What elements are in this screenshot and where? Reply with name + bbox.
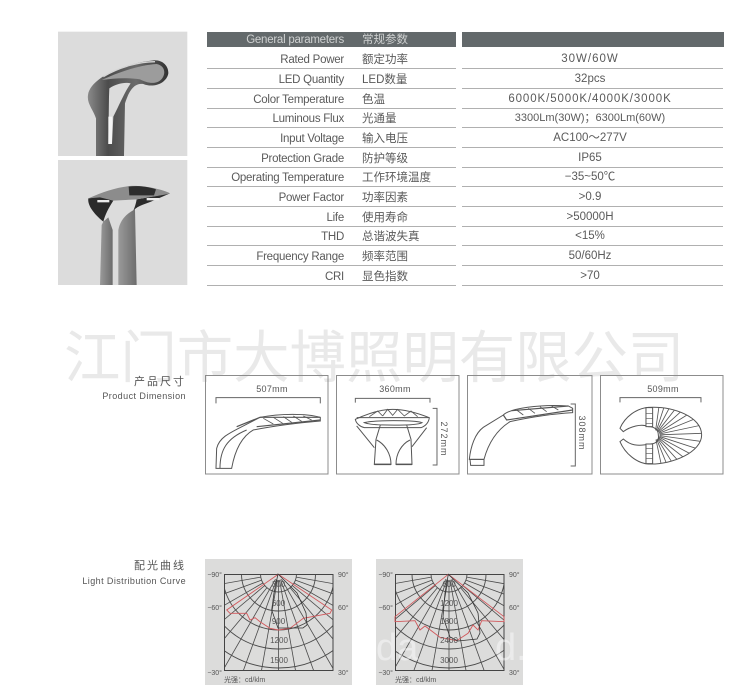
text: 308mm: 308mm bbox=[577, 415, 587, 451]
row: rated power: Rated Power bbox=[280, 54, 344, 66]
chart 1 labels: 60° bbox=[338, 604, 349, 612]
chart 1 labels: 900 bbox=[272, 617, 286, 626]
row: CRI bbox=[207, 270, 723, 286]
table header: right bar bbox=[462, 32, 724, 47]
label: light distribution curve: 配光曲线 bbox=[134, 558, 186, 572]
text: 272mm: 272mm bbox=[439, 421, 449, 457]
chart 2 labels: −90° bbox=[378, 571, 393, 579]
label: light distribution curve bbox=[82, 558, 186, 586]
red curve 1 bbox=[227, 574, 332, 630]
chart panel: light distribution curve 2 bbox=[376, 559, 523, 685]
chart 2 labels: −30° bbox=[378, 669, 393, 677]
chart 1 labels: −30° bbox=[207, 669, 222, 677]
drawing: lamp outline top bbox=[619, 397, 702, 464]
chart 2 labels: 90° bbox=[509, 571, 520, 579]
row: protection grade: IP65 bbox=[578, 152, 602, 164]
drawing: lamp outline side 2 bbox=[469, 404, 575, 466]
row: operating temperature bbox=[207, 171, 723, 187]
row: THD: 总谐波失真 bbox=[362, 230, 420, 242]
watermark: white letters over chart 2: da bbox=[376, 627, 419, 669]
text: 507mm: 507mm bbox=[256, 384, 288, 394]
row: color temperature: 6000K/5000K/4000K/3000K bbox=[508, 93, 672, 105]
row: CRI: >70 bbox=[580, 270, 600, 282]
chart 1 labels: 600 bbox=[272, 599, 286, 608]
row: THD: THD bbox=[321, 231, 344, 243]
row: rated power bbox=[207, 53, 723, 69]
row: life: Life bbox=[326, 212, 344, 224]
row: LED quantity: LED数量 bbox=[362, 74, 407, 86]
row: CRI: 显色指数 bbox=[362, 270, 408, 282]
header row text: General parameters bbox=[246, 34, 344, 46]
box: side dimension 507mm bbox=[206, 376, 328, 474]
row: operating temperature: Operating Temperature bbox=[231, 172, 344, 184]
row: luminous flux: 3300Lm(30W)；6300Lm(60W) bbox=[515, 112, 665, 124]
chart 2 labels: 光强：cd/klm bbox=[395, 675, 436, 684]
row: input voltage: 输入电压 bbox=[362, 132, 408, 144]
chart 1 labels: −60° bbox=[207, 604, 222, 612]
row: luminous flux: 光通量 bbox=[362, 112, 396, 124]
drawing: lamp outline front bbox=[355, 398, 437, 465]
row: frequency range bbox=[207, 250, 723, 266]
header row text: 常规参数 bbox=[362, 34, 408, 46]
chart 2 labels bbox=[378, 571, 520, 684]
row: operating temperature: 工作环境温度 bbox=[362, 172, 431, 184]
row: luminous flux: Luminous Flux bbox=[272, 113, 344, 125]
row: protection grade bbox=[207, 152, 723, 168]
row: input voltage: Input Voltage bbox=[280, 133, 344, 145]
chart 2 labels: 60° bbox=[509, 604, 520, 612]
row: THD: <15% bbox=[575, 230, 605, 242]
photo: lamp front view bbox=[58, 160, 187, 285]
row: frequency range: 频率范围 bbox=[362, 250, 408, 262]
chart panel: light distribution curve 1 bbox=[205, 559, 352, 685]
row: frequency range: Frequency Range bbox=[256, 251, 344, 263]
chart 1 labels: −90° bbox=[207, 571, 222, 579]
row: operating temperature: −35~50℃ bbox=[565, 171, 615, 183]
chart 1 labels: 1200 bbox=[270, 636, 288, 645]
row: life: 使用寿命 bbox=[362, 212, 408, 224]
black curve 2 bbox=[443, 574, 480, 641]
chart 2 labels: 1800 bbox=[440, 617, 458, 626]
box: front dimension 360mm x 272mm bbox=[336, 376, 459, 474]
row: power factor bbox=[207, 191, 723, 207]
chart 2 labels: 3000 bbox=[440, 656, 458, 665]
table header: left bar bbox=[207, 32, 456, 47]
chart 1 labels: 90° bbox=[338, 571, 349, 579]
text: 509mm: 509mm bbox=[647, 384, 679, 394]
row: color temperature: 色温 bbox=[362, 94, 385, 106]
watermark: company name: 江门市大博照明有限公司 bbox=[64, 326, 684, 389]
row: protection grade: Protection Grade bbox=[261, 153, 344, 165]
row: THD bbox=[207, 230, 723, 246]
table: general parameters bbox=[207, 32, 724, 286]
polar grid 1 bbox=[225, 575, 332, 670]
row: CRI: CRI bbox=[325, 271, 344, 283]
chart 1 labels bbox=[207, 571, 349, 684]
row: LED quantity bbox=[207, 73, 723, 89]
row: power factor: 功率因素 bbox=[362, 192, 408, 204]
row: color temperature: Color Temperature bbox=[253, 94, 344, 106]
chart 2 labels: 2400 bbox=[440, 636, 458, 645]
chart 2 labels: 600 bbox=[442, 580, 456, 589]
row: LED quantity: 32pcs bbox=[575, 73, 605, 85]
watermark: white letters at chart 2 right: d. bbox=[495, 627, 527, 669]
row: input voltage bbox=[207, 132, 723, 148]
red curve 2 bbox=[395, 574, 504, 641]
row: input voltage: AC100～277V bbox=[553, 132, 627, 144]
chart 2 labels: 30° bbox=[509, 669, 520, 677]
row: protection grade: 防护等级 bbox=[362, 152, 408, 164]
row: rated power: 额定功率 bbox=[362, 54, 408, 66]
text: 360mm: 360mm bbox=[379, 384, 411, 394]
black curve 1 bbox=[272, 574, 307, 628]
chart 1 labels: 1500 bbox=[270, 656, 288, 665]
label: product dimension bbox=[102, 374, 186, 401]
chart 2 labels: −60° bbox=[378, 604, 393, 612]
polar grid 2 bbox=[396, 575, 504, 670]
chart 1 labels: 30° bbox=[338, 669, 349, 677]
row: life: >50000H bbox=[566, 211, 614, 223]
row: power factor: >0.9 bbox=[579, 191, 601, 203]
row: luminous flux bbox=[207, 112, 723, 128]
box: side dimension 308mm bbox=[468, 376, 592, 474]
drawing: lamp outline side bbox=[216, 398, 320, 468]
label: light distribution curve: Light Distribution Curve bbox=[82, 576, 186, 586]
label: product dimension: Product Dimension bbox=[102, 391, 186, 401]
box: top dimension 509mm bbox=[600, 376, 723, 484]
row: frequency range: 50/60Hz bbox=[569, 250, 611, 262]
header row text bbox=[246, 33, 408, 46]
label: product dimension: 产品尺寸 bbox=[134, 374, 186, 388]
row: LED quantity: LED Quantity bbox=[279, 74, 344, 86]
chart 2 labels: 1200 bbox=[440, 599, 458, 608]
row: rated power: 30W/60W bbox=[561, 53, 619, 65]
chart 1 labels: 300 bbox=[272, 580, 286, 589]
photo: lamp side view bbox=[58, 32, 187, 156]
chart 1 labels: 光强：cd/klm bbox=[224, 675, 265, 684]
row: color temperature bbox=[207, 93, 723, 109]
row: power factor: Power Factor bbox=[279, 192, 344, 204]
row: life bbox=[207, 211, 723, 227]
